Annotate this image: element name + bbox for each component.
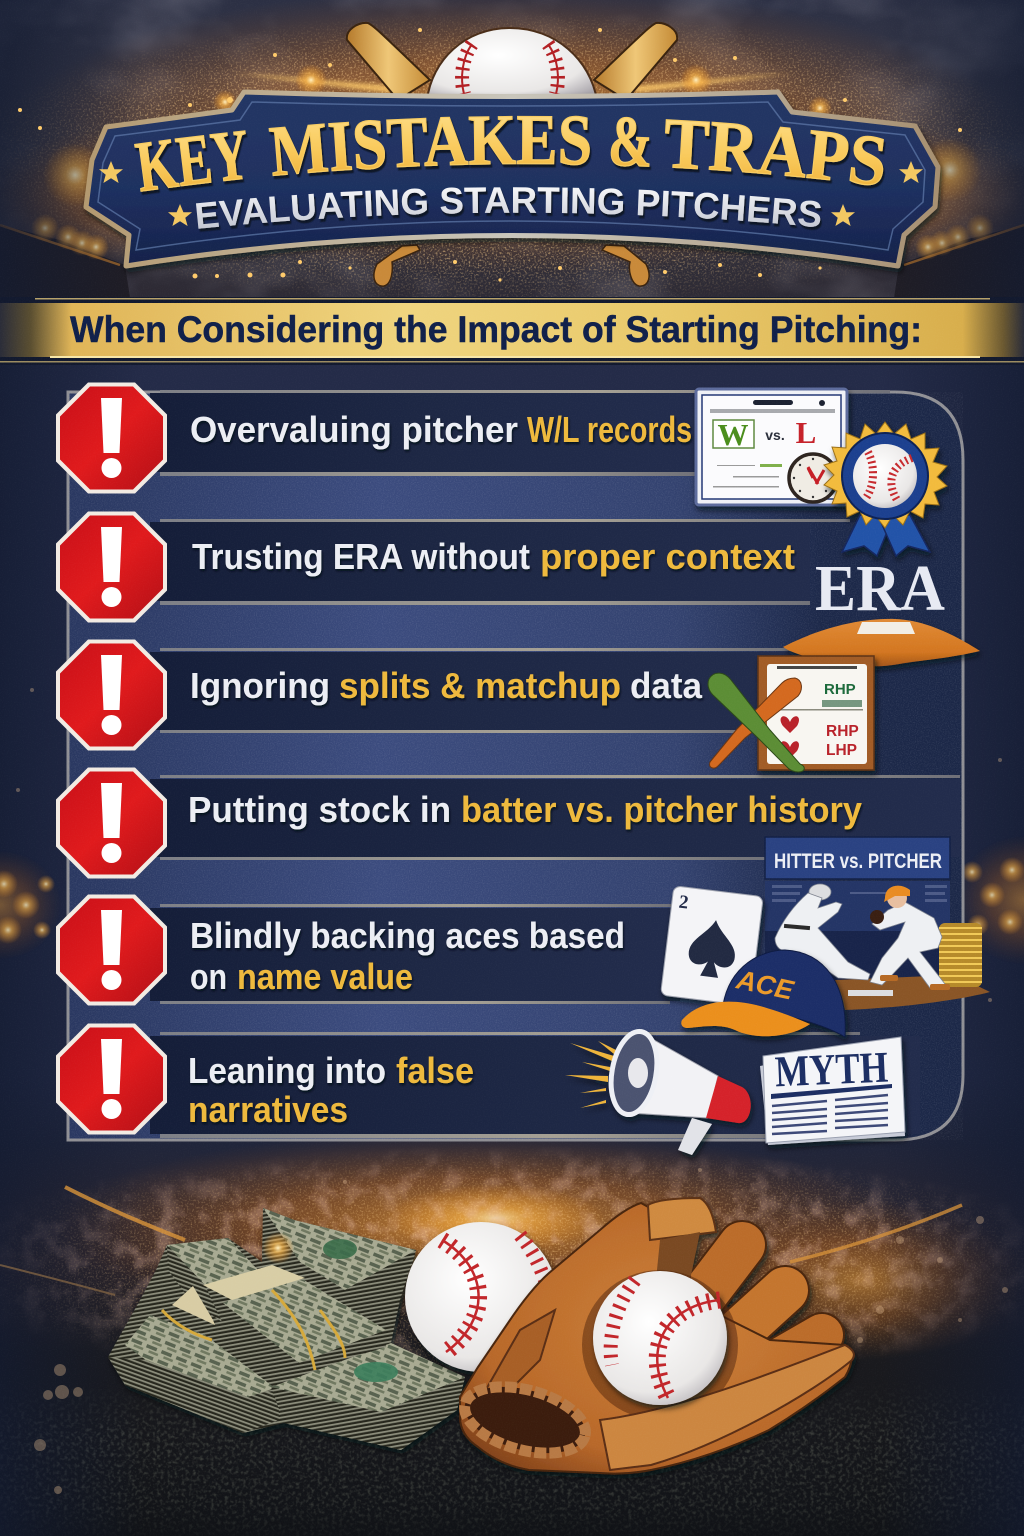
banner plaque (86, 92, 938, 266)
green bat (708, 673, 804, 772)
title: key mistakes and traps: KEY (134, 130, 248, 196)
webbing (648, 1198, 716, 1240)
lower right stack (271, 1377, 465, 1450)
side lights (0, 835, 1024, 965)
title: key mistakes and traps: & (610, 116, 652, 170)
row 2 text (192, 536, 795, 577)
clipboard: RHP (826, 723, 859, 740)
row 5 text: name value (237, 956, 413, 997)
mouth (605, 1028, 663, 1118)
icon: stopwatch (789, 454, 837, 502)
icon: ace of spades card (661, 886, 763, 1006)
lower glow and field (50, 1130, 910, 1320)
row 3 text: splits & matchup (339, 665, 621, 706)
row 4 text: batter vs. pitcher history (461, 789, 862, 830)
subtitle: evaluating starting pitchers: EVALUATING STARTING PITCHERS (196, 187, 822, 232)
icon: pitching mound (783, 619, 980, 666)
row 3 text: Ignoring (190, 665, 330, 706)
clipboard: RHP (824, 681, 856, 698)
icon: win-loss record window: vs. (765, 427, 785, 443)
panel frame (68, 392, 963, 1140)
row 6 text: narratives (188, 1089, 348, 1130)
handle (678, 1118, 712, 1155)
clipboard: LHP (826, 742, 857, 759)
row 5 text: on (190, 956, 227, 997)
icon: ERA lettering: ERA (815, 552, 945, 625)
lower left stack (108, 1357, 279, 1433)
icon: ACE baseball cap: ACE (733, 964, 797, 1006)
laced pocket (457, 1375, 593, 1465)
alert icon 5 (56, 894, 167, 1006)
row 6 (56, 1024, 920, 1138)
dirt platform (835, 975, 990, 1010)
alert icon 3 (56, 640, 167, 750)
row 4 (56, 768, 960, 878)
back left stack (167, 1238, 258, 1285)
icon: myth newspaper: MYTH (774, 1042, 889, 1096)
icon: myth newspaper (760, 1037, 905, 1145)
hitter figure (775, 884, 870, 980)
fingers (700, 1245, 822, 1385)
sound rays (565, 1041, 616, 1108)
flare between stacks (262, 1232, 294, 1264)
red cap (706, 1076, 751, 1123)
thumb strap (600, 1345, 854, 1470)
heel lacing (480, 1310, 555, 1410)
row 1 (56, 382, 890, 494)
illustration: baseball in glove (593, 1271, 727, 1405)
alert icon 2 (56, 512, 167, 622)
row 2 (56, 512, 850, 622)
orange bat (710, 678, 801, 768)
left bat handle (374, 245, 420, 286)
body (630, 1031, 718, 1118)
icon: win-loss record window (696, 389, 847, 505)
row 6 text: false (396, 1050, 474, 1091)
row 4 text (188, 789, 862, 830)
row 4 text: Putting stock in (188, 789, 451, 830)
row 1 text (190, 409, 692, 450)
pitcher figure (870, 902, 945, 988)
coin stack (939, 923, 982, 987)
palm and thumb (460, 1203, 852, 1474)
row 2 text: Trusting ERA without (192, 536, 530, 577)
icon: hitter vs pitcher scoreboard (765, 837, 950, 991)
paper band (203, 1265, 305, 1300)
illustration: leather glove (457, 1198, 854, 1474)
clipboard (758, 656, 874, 770)
right bat handle (602, 245, 649, 286)
icon: ace of spades card: 2 (678, 892, 690, 914)
side fold (172, 1286, 215, 1325)
row 2 text: proper context (540, 536, 795, 577)
icon: dirt mound, coins and players (775, 884, 990, 1010)
baseball above the banner (427, 28, 597, 100)
alert icon 4 (56, 768, 167, 878)
row 5 (56, 894, 680, 1006)
row 3 text (190, 665, 703, 706)
right bat head (594, 23, 677, 100)
rubber bands (272, 1290, 315, 1370)
icon: splits clipboard and bats (708, 656, 874, 772)
shadow behind ball (582, 1270, 738, 1420)
alert icon 1 (56, 382, 167, 494)
heading text: When Considering the Impact of Starting Pitching: (70, 309, 922, 350)
row 5 text: Blindly backing aces based (190, 915, 625, 956)
cash silhouette (108, 1208, 465, 1450)
illustration: large baseball (405, 1222, 557, 1372)
title banner (83, 90, 946, 274)
stadium stands (0, 225, 130, 298)
panel: mistakes list (56, 382, 963, 1140)
title: key mistakes and traps: MISTAKES (268, 116, 592, 180)
icon: megaphone (565, 1028, 751, 1155)
row 6 text (188, 1050, 474, 1130)
sparks around the banner (18, 28, 962, 282)
back top stack (263, 1208, 416, 1290)
banner stars (99, 161, 923, 226)
icon: ACE baseball cap (681, 950, 845, 1037)
heading strip (0, 297, 1024, 365)
row 3 (56, 640, 800, 750)
row 6 text: Leaning into (188, 1050, 386, 1091)
row 1 text: Overvaluing pitcher (190, 409, 518, 450)
scene: stadium bokeh dots (16, 688, 1008, 1494)
row 3 text: data (630, 665, 703, 706)
crossed bats behind the banner (347, 23, 677, 286)
left bat head (347, 23, 430, 100)
row 5 text (190, 915, 625, 997)
title: key mistakes and traps: TRAPS (665, 119, 886, 189)
middle stack (223, 1303, 386, 1382)
row 1 text: W/L records (527, 409, 692, 450)
illustration: stacks of cash (108, 1208, 465, 1450)
title: key mistakes and traps (134, 116, 886, 196)
alert icon 6 (56, 1024, 167, 1134)
icon: award ribbon with baseball (824, 422, 947, 556)
icon: win-loss record window: L (796, 415, 816, 450)
icon: win-loss record window: W (718, 417, 748, 452)
icon: hitter vs pitcher scoreboard: HITTER vs. PITCHER (774, 850, 942, 873)
